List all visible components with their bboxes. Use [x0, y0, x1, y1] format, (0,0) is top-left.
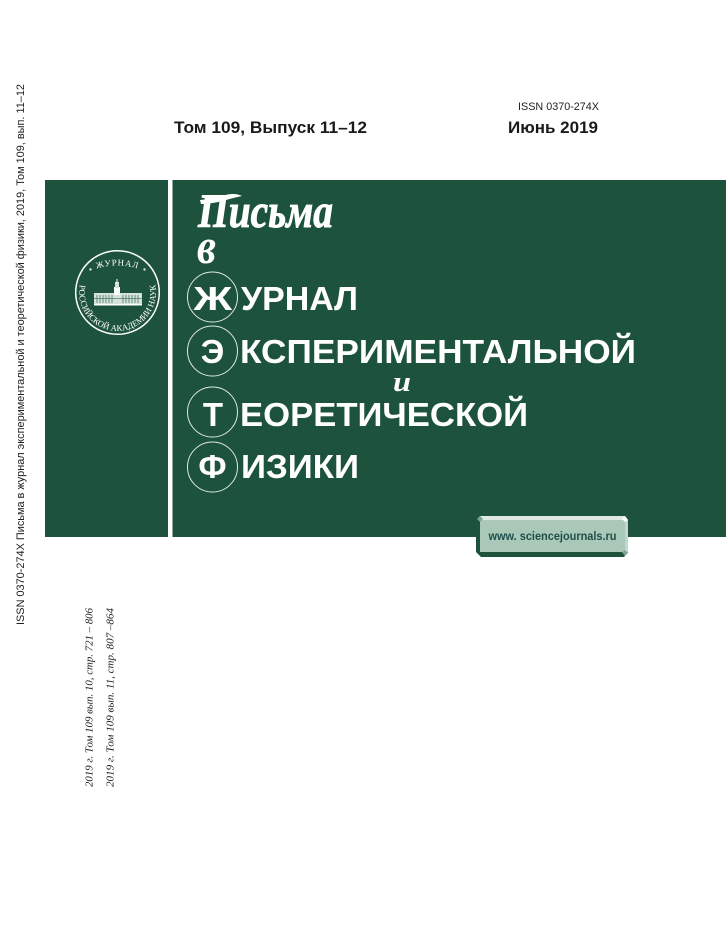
title line: Журнал [188, 272, 358, 322]
issue range line 1: 2019 г. Том 109 вып. 10, стр. 721 – 806 [84, 608, 96, 787]
ISSN: ISSN 0370-274X [518, 101, 599, 113]
title line: Экспериментальной: КСПЕРИМЕНТАЛЬНОЙ [240, 332, 636, 370]
icon: academy emblem [74, 250, 160, 335]
title line: Журнал: Ж [192, 280, 232, 317]
title line: Теоретической: ЕОРЕТИЧЕСКОЙ [240, 395, 528, 433]
title line: Физики: ИЗИКИ [241, 448, 359, 485]
script word: и: и [393, 366, 411, 398]
emblem top text: ЖУРНАЛ [96, 260, 139, 268]
website button [476, 516, 628, 557]
spine text: ISSN 0370-274X Письма в журнал экспериментальной и теоретической физики, 2019, Том 109, вып. 11–12 [15, 84, 27, 625]
title line: Экспериментальной [188, 326, 636, 376]
title line: Физики: Ф [198, 448, 227, 485]
title line: Физики [188, 442, 359, 492]
panel: green cover band [45, 180, 726, 537]
volume and issue: Том 109, Выпуск 11–12 [174, 119, 367, 137]
website address: www. sciencejournals.ru [488, 531, 616, 543]
emblem bottom text: РОССИЙСКОЙ АКАДЕМИИ НАУК [79, 284, 156, 331]
script word: в: в [197, 218, 216, 274]
script heading: Письма: Письма [197, 185, 333, 238]
title line: Теоретической: Т [203, 396, 223, 433]
title line: Журнал: УРНАЛ [241, 280, 358, 317]
date: Июнь 2019 [508, 119, 598, 137]
title line: Теоретической [188, 387, 528, 437]
emblem building [94, 279, 142, 306]
title line: Экспериментальной: Э [201, 333, 224, 370]
issue range line 2: 2019 г. Том 109 вып. 11, стр. 807 –864 [106, 608, 116, 787]
